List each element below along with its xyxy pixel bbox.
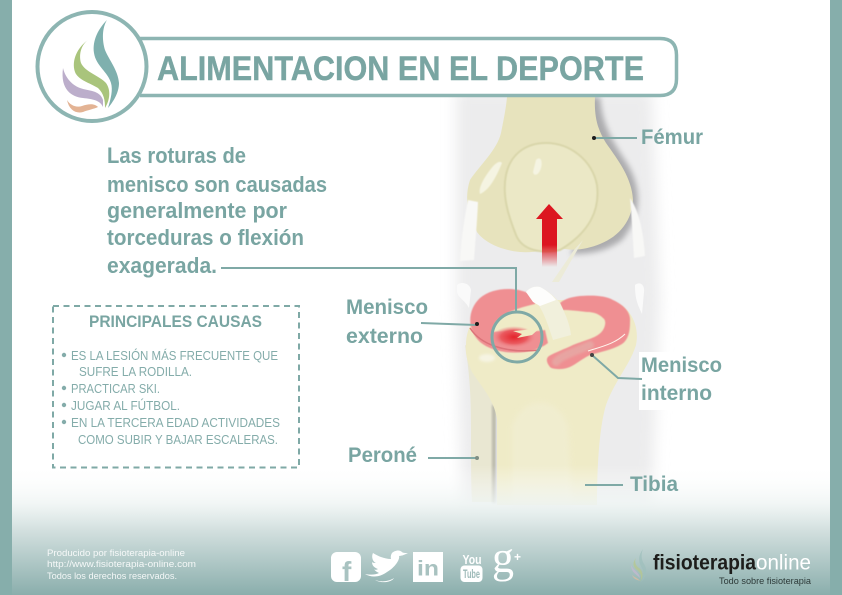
footer credits: Producido por fisioterapia-online <box>47 548 185 558</box>
fibula shadow <box>492 405 496 503</box>
femur shadow <box>570 97 638 254</box>
bottom gradient band <box>0 465 842 595</box>
icon: google plus: + <box>514 550 521 564</box>
icon: twitter <box>365 550 408 582</box>
tibial shaft highlight <box>512 402 572 505</box>
causes list <box>62 348 280 447</box>
external meniscus rim <box>470 328 540 351</box>
label: Tibia: Tibia <box>630 473 678 496</box>
icon: youtube: You <box>462 552 482 567</box>
icon: facebook <box>331 552 361 587</box>
dashed border <box>53 306 299 468</box>
meniscus tear <box>492 326 536 348</box>
title: ALIMENTACION EN EL DEPORTE <box>157 50 644 88</box>
label: Peroné: Peroné <box>348 444 417 467</box>
intro paragraph: exagerada. <box>107 253 217 278</box>
causes list: COMO SUBIR Y BAJAR ESCALERAS. <box>78 432 278 447</box>
flame: green <box>74 40 109 108</box>
external meniscus <box>470 289 548 353</box>
logo badge <box>38 12 146 121</box>
footer brand logo <box>631 549 812 587</box>
central ligament <box>526 287 571 340</box>
internal meniscus rim <box>588 334 625 351</box>
causes list: JUGAR AL FÚTBOL. <box>71 398 180 413</box>
label: Fémur <box>592 126 703 149</box>
knee illustration <box>456 90 660 505</box>
grey backdrop <box>456 90 660 505</box>
cruciate ligament strand <box>552 240 583 282</box>
callout line and circle <box>221 268 542 362</box>
label: Fémur: Fémur <box>641 126 703 149</box>
brand tagline: Todo sobre fisioterapia <box>719 576 812 587</box>
flame: teal <box>94 20 119 108</box>
icon: facebook: f <box>342 556 352 587</box>
internal meniscus fade <box>556 345 590 362</box>
footer credits <box>47 548 196 581</box>
icon: youtube: Tube <box>463 567 480 581</box>
red arrow <box>536 204 563 267</box>
intro paragraph: generalmente por <box>107 198 287 223</box>
label: Menisco externo <box>346 296 479 348</box>
social icons <box>331 533 521 587</box>
tibia <box>466 300 637 505</box>
right lower ligament <box>635 283 644 314</box>
femur trochlea <box>505 143 598 251</box>
causes list: EN LA TERCERA EDAD ACTIVIDADES <box>71 415 280 430</box>
brand flames <box>631 549 646 582</box>
femur <box>467 97 633 252</box>
label: Tibia <box>585 473 678 496</box>
right side bar <box>830 0 842 595</box>
flame: orange <box>67 100 98 112</box>
causes list: ES LA LESIÓN MÁS FRECUENTE QUE <box>71 348 278 363</box>
central ligament head <box>526 287 556 306</box>
intro paragraph: menisco son causadas <box>107 172 327 197</box>
panel heading: PRINCIPALES CAUSAS <box>89 313 262 331</box>
flame: purple <box>63 68 103 107</box>
panel: principales causas <box>53 306 299 468</box>
causes list: PRACTICAR SKI. <box>71 381 160 396</box>
badge ring <box>38 12 146 121</box>
label: Menisco interno <box>590 353 722 405</box>
left side bar <box>0 0 12 595</box>
icon: linkedin: in <box>417 558 439 580</box>
icon: google plus: g <box>492 533 514 582</box>
femur highlights <box>480 158 542 194</box>
intro paragraph <box>107 143 327 278</box>
brand name: fisioterapia <box>653 552 756 574</box>
footer credits: Todos los derechos reservados. <box>47 571 177 581</box>
label: Peroné <box>348 444 479 467</box>
intro paragraph: torceduras o flexión <box>107 225 304 250</box>
icon: linkedin <box>413 552 443 582</box>
icon: youtube <box>460 552 482 582</box>
label: Menisco interno: Menisco <box>641 354 722 377</box>
intro paragraph: Las roturas de <box>107 143 246 168</box>
label: Menisco externo: externo <box>346 325 423 348</box>
left upper ligament <box>460 200 478 261</box>
fibula <box>465 345 496 502</box>
brand suffix: online <box>756 552 811 574</box>
white label backing: menisco interno <box>639 352 726 410</box>
internal meniscus <box>547 296 630 369</box>
causes list: SUFRE LA RODILLA. <box>79 364 192 379</box>
footer credits: http://www.fisioterapia-online.com <box>47 559 196 569</box>
label: Menisco externo: Menisco <box>346 296 428 319</box>
label: Menisco interno: interno <box>641 382 712 405</box>
tibia highlight <box>479 354 495 362</box>
right upper ligament <box>630 198 645 258</box>
title bar <box>140 38 676 96</box>
left lower ligament <box>457 283 471 308</box>
tear notch <box>513 326 542 338</box>
